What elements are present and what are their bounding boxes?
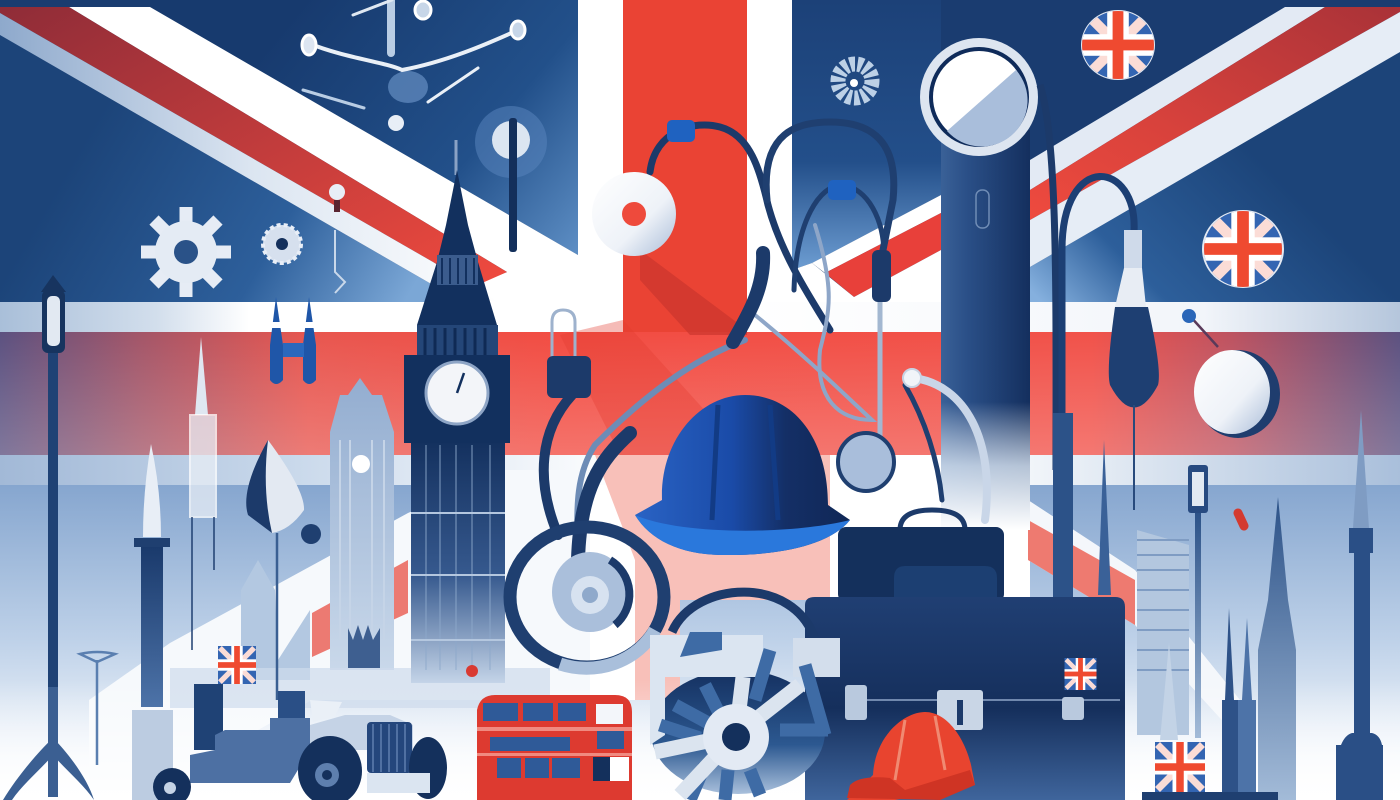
stethoscope chest piece: [592, 172, 676, 256]
large briefcase: [805, 597, 1125, 800]
left lamp post: [3, 275, 94, 800]
red hard hat: [847, 712, 975, 800]
large gear machine: [650, 592, 840, 800]
blue H connector: [270, 297, 316, 384]
small blue pin: [1182, 309, 1218, 347]
round flag top right: [1081, 9, 1155, 81]
Big Ben tower: [404, 140, 510, 683]
round flag right: [1202, 210, 1284, 288]
small red pin: [1238, 513, 1244, 526]
tall pillar with dial: [920, 38, 1038, 530]
thin wire: [335, 230, 345, 293]
red double decker bus: [477, 695, 632, 800]
slim spire: [190, 337, 216, 650]
small rosette gear: [838, 64, 872, 98]
distant skyline left: [170, 378, 550, 708]
red pin on skyline: [466, 665, 478, 677]
left column: [132, 444, 173, 800]
sail shaped pod: [246, 440, 321, 700]
parliament silhouette: [348, 625, 380, 668]
street lamp bottom left: [80, 652, 115, 765]
mechanical parts at top: [302, 0, 525, 131]
hanging probe: [1040, 85, 1159, 597]
padlock clip: [547, 310, 591, 398]
small gear: [263, 225, 301, 263]
blue hard hat: [635, 395, 850, 555]
right skyline: [1098, 440, 1296, 800]
white ball: [1194, 350, 1280, 438]
far right column: [1336, 410, 1383, 800]
right lamp post: [1188, 465, 1208, 738]
large gear: [141, 207, 231, 297]
small flag on pole: [218, 646, 256, 684]
ring with rod icon: [475, 106, 547, 252]
stethoscope: [544, 120, 987, 570]
small briefcase: [838, 510, 1004, 602]
ring stethoscope left: [510, 527, 664, 668]
tractor: [153, 684, 447, 800]
small flag bottom right: [1142, 742, 1278, 800]
small pin on red stripe: [329, 184, 345, 212]
